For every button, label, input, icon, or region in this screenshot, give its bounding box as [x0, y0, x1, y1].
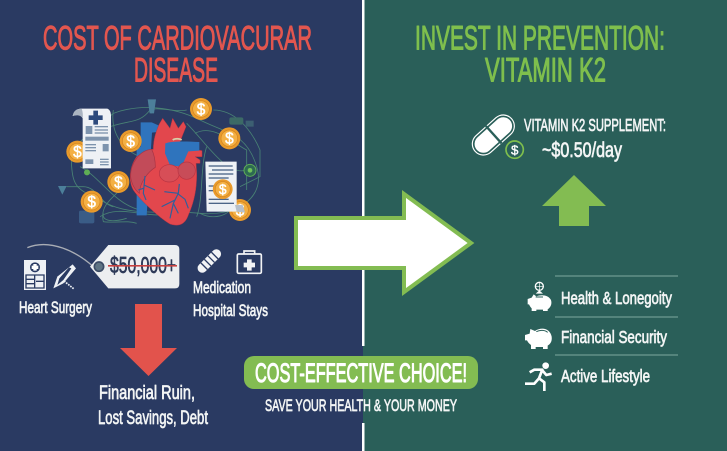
- network lines: [67, 108, 260, 223]
- icon: bandage: [196, 247, 223, 275]
- heading: cost of cardiovascular disease: COST OF CARDIOVACURAR: [43, 20, 312, 58]
- text: financial ruin: Lost Savings, Debt: [98, 407, 208, 429]
- label: financial security: Financial Security: [561, 327, 667, 347]
- center divider: [362, 0, 364, 451]
- icon: surgery clipboard: [24, 260, 46, 290]
- chambers: [159, 165, 179, 182]
- invoice document: [205, 162, 245, 213]
- left atrium: [131, 149, 155, 193]
- arrow: large white transition arrow: [296, 194, 471, 292]
- small network nodes: [58, 99, 256, 223]
- banner: cost-effective choice: COST-EFFECTIVE CHOICE!: [255, 358, 467, 388]
- icon: supplement pill with dollar badge: $: [511, 143, 519, 158]
- heart: [130, 118, 202, 225]
- text: financial ruin: Financial Ruin,: [99, 382, 195, 404]
- arrow: green up: [542, 175, 606, 226]
- aorta and heart body: [130, 118, 202, 225]
- label: heart surgery: Heart Surgery: [19, 298, 92, 317]
- blue vessels behind heart: [137, 122, 160, 215]
- inner vessel arch: [173, 139, 182, 140]
- label: active lifestyle: Active Lifestyle: [561, 366, 650, 386]
- arrow: red down: [120, 304, 177, 376]
- banner: cost-effective choice: [244, 356, 478, 389]
- price tag with string: [27, 245, 179, 288]
- text: price per day: ~$0.50/day: [542, 139, 622, 162]
- tagline: SAVE YOUR HEALTH & YOUR MONEY: [265, 396, 457, 415]
- label: medication: Medication: [193, 278, 251, 297]
- icon: piggy bank: [525, 329, 552, 349]
- heading: cost of cardiovascular disease: DISEASE: [134, 52, 218, 90]
- coins behind documents: [66, 141, 251, 221]
- coins: [81, 98, 240, 213]
- icon: scalpel: [53, 264, 76, 289]
- benefits list: [525, 276, 678, 391]
- panel: prevention background: [363, 0, 727, 451]
- price: $50,000+ struck through: $50,000+: [110, 252, 176, 278]
- coronary veins: [138, 176, 188, 218]
- icon: running figure: [525, 362, 552, 391]
- heading: invest in prevention: [415, 20, 665, 90]
- heading: invest in prevention: VITAMIN K2: [485, 52, 606, 90]
- icon: first aid kit: [237, 251, 261, 273]
- medical bill: [73, 109, 111, 168]
- label: health and longevity: Health & Lonegoity: [561, 288, 672, 308]
- illustration: heart with bills and coins: [58, 98, 260, 225]
- text: financial ruin: [98, 382, 208, 429]
- heading: cost of cardiovascular disease: [43, 20, 312, 90]
- icon: supplement pill with dollar badge: [467, 110, 523, 160]
- price: $50,000+ struck through: [108, 252, 177, 278]
- panel: cost of disease background: [0, 0, 363, 451]
- icon: piggy bank with globe: [528, 282, 551, 311]
- label: hospital stays: Hospital Stays: [193, 301, 268, 320]
- pulmonary artery: [165, 142, 199, 167]
